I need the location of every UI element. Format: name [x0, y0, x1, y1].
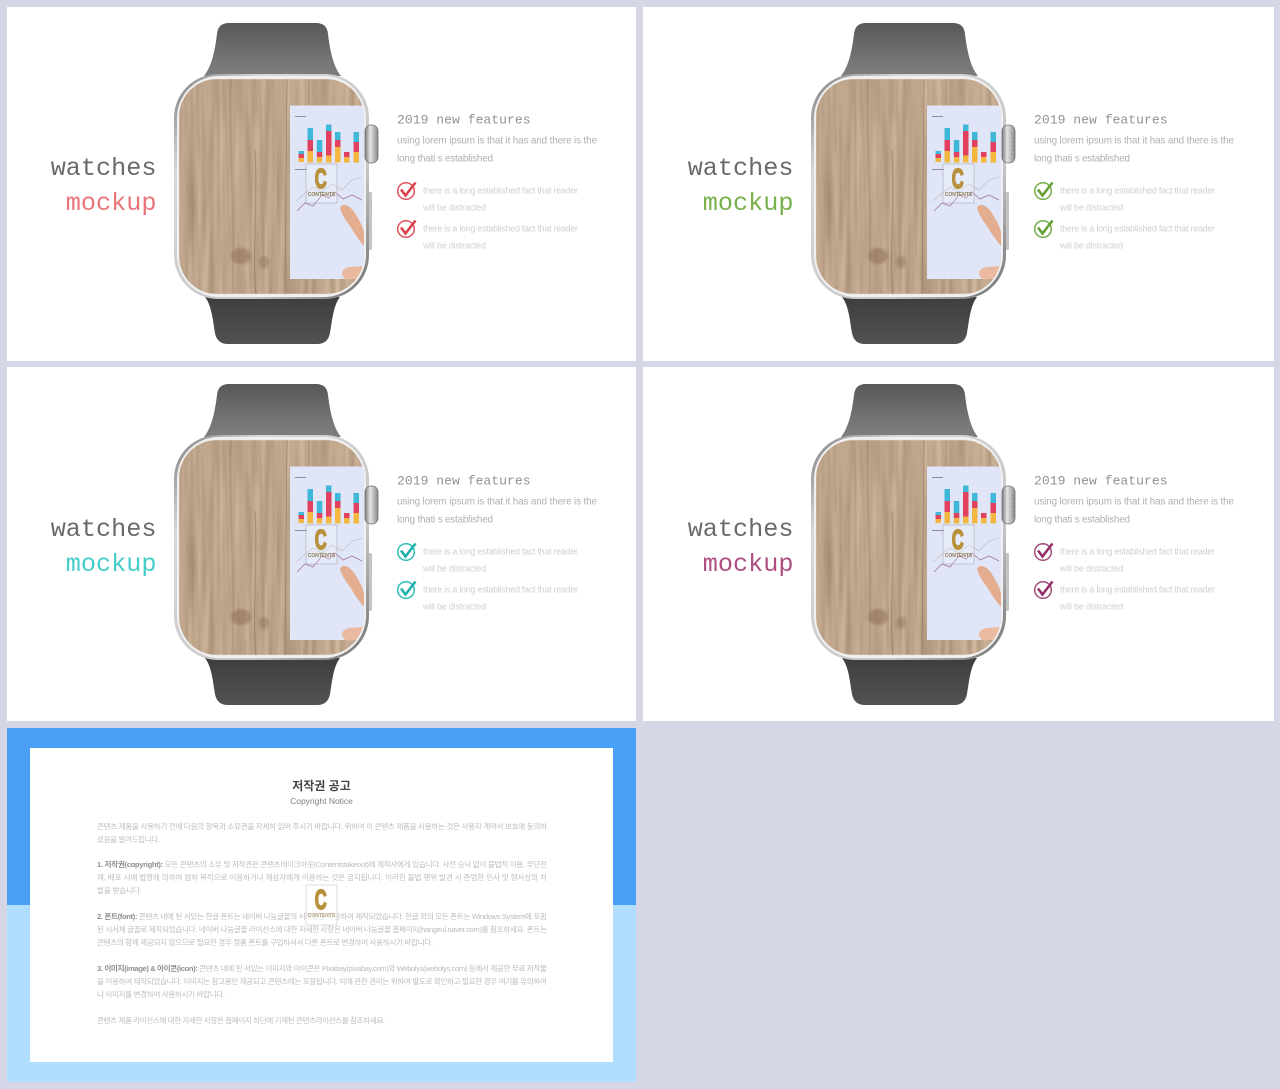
text block: intro: 콘텐츠 제품을 사용하기 전에 다음의 항목과 소유권을 자세히 읽어 주시기 바랍니다. 위하여 이 콘텐츠 제품을 사용하는 것은 사용자 계약서 보호에 동의하 — [97, 821, 547, 831]
panel: copyright notice — [7, 728, 636, 1082]
text block: section 1 copyright: 벌을 받습니다. — [97, 885, 142, 895]
text block: section 3 image and icon: 나 이미지를 변경하여 사용하시기 바랍니다. — [97, 989, 225, 999]
text block: section 1 copyright: 1. 저작권(copyright): 모든 콘텐츠의 소유 및 저작권은 콘텐츠테이크아웃(Contentstakeout)에 제작사에게 있습니다. 사전 승낙 없이 불법적 이용, 무단전 — [97, 859, 547, 869]
icon: watch mockup teal — [174, 384, 378, 705]
panel: plum watch slide — [643, 367, 1274, 721]
title: watches mockup plum: mockup — [703, 550, 794, 579]
text block: features red: 2019 new features — [397, 112, 531, 128]
text block: features teal: 2019 new features — [397, 474, 531, 488]
checklist item 2 plum: will be distracted — [1059, 602, 1123, 612]
title: watches mockup teal — [51, 515, 156, 579]
text block: features plum: long thati s established — [1034, 514, 1130, 526]
text block: intro — [97, 821, 547, 844]
text block: features teal — [397, 474, 598, 526]
checklist item 1 plum: there is a long established fact that reader — [1060, 546, 1215, 556]
text block: features green: long thati s established — [1034, 154, 1130, 164]
logo watermark center — [306, 884, 337, 925]
text block: features plum: using lorem ipsum is that it has and there is the — [1034, 496, 1234, 508]
text block: intro: 셨음을 알려드립니다. — [97, 834, 160, 844]
text block: section 3 image and icon: 을 이용하여 제작되었습니다. 이미지는 참고용만 제공되고 콘텐츠에는 포함됩니다. 이에 관한 권리는 위하여 별도로 확인하고 필요한 경우 여기를 유의하여 — [97, 976, 547, 986]
text block: features plum — [1034, 474, 1234, 526]
text block: section 1 copyright: 재, 배포 시에 법령에 의하여 엄히 목적으로 이용하거나 제삼자에게 이용하는 것은 금지됩니다. 이러한 불법 행위 발견 시 준엄한 민사 및 형사상의 처 — [97, 872, 547, 882]
text block: section 3 image and icon — [97, 963, 547, 999]
checklist item 1 teal: will be distracted — [422, 564, 486, 574]
text block: license footer: 콘텐츠 제품 라이선스에 대한 자세한 사항은 홈페이지 하단에 기재된 콘텐츠라이선스를 참조하세요. — [97, 1015, 385, 1025]
checklist item 1 green — [1035, 182, 1215, 212]
text block: section 2 font: 콘텐츠의 함께 제공되지 않으므로 필요한 경우 정품 폰트를 구입하셔서 다른 폰트로 변경하여 사용하시기 바랍니다. — [97, 937, 433, 947]
text block: features green: using lorem ipsum is that it has and there is the — [1034, 136, 1234, 146]
logo watermark red: C — [315, 163, 327, 194]
logo watermark green: C — [952, 163, 964, 194]
logo watermark plum: CONTENTS — [945, 553, 973, 559]
text block: features teal: using lorem ipsum is that it has and there is the — [397, 496, 598, 508]
icon: watch mockup green — [811, 23, 1015, 344]
logo watermark plum — [943, 524, 974, 564]
icon: watch mockup red — [174, 23, 378, 344]
logo watermark center: C — [315, 884, 327, 915]
checklist item 2 green: there is a long established fact that reader — [1060, 224, 1215, 234]
title: watches mockup plum — [688, 515, 794, 579]
checklist item 1 green: there is a long established fact that reader — [1060, 186, 1215, 196]
logo watermark teal: CONTENTS — [308, 553, 336, 559]
heading: copyright notice: 저작권 공고 — [292, 778, 351, 793]
checklist item 1 red: there is a long established fact that reader — [423, 186, 578, 196]
checklist item 2 teal: there is a long established fact that reader — [423, 584, 578, 594]
checklist item 1 plum — [1035, 544, 1215, 574]
text block: features green — [1034, 112, 1234, 164]
logo watermark green — [943, 163, 974, 203]
text block: features red: long thati s established — [397, 154, 493, 164]
text block: features red — [397, 112, 598, 164]
checklist item 2 green — [1035, 220, 1215, 250]
checklist item 2 red: there is a long established fact that reader — [423, 224, 578, 234]
checklist item 1 plum: will be distracted — [1059, 564, 1123, 574]
checklist item 1 green: will be distracted — [1059, 202, 1123, 212]
logo watermark green: CONTENTS — [945, 192, 973, 198]
panel: red watch slide — [7, 7, 636, 361]
logo watermark center: CONTENTS — [308, 913, 336, 919]
text block: section 1 copyright — [97, 859, 547, 895]
title: watches mockup green: watches — [688, 154, 794, 183]
text block: section 2 font: 2. 폰트(font): 콘텐츠 내에 된 서있는 한글 폰트는 네이버 나눔글꼴의 서작물을 바탕하여 제작되었습니다. 한글 외의 모든 폰트는 Windows System에 포함 — [97, 911, 547, 921]
title: watches mockup green — [688, 154, 794, 218]
checklist item 2 red: will be distracted — [422, 240, 486, 250]
panel: teal watch slide — [7, 367, 636, 721]
checklist item 2 teal: will be distracted — [422, 602, 486, 612]
logo watermark red — [306, 163, 337, 203]
title: watches mockup teal: watches — [51, 515, 156, 544]
text block: features teal: long thati s established — [397, 514, 493, 526]
text block: section 2 font: 된 시서체 글꼴로 제작되었습니다. 네이버 나눔글꼴 라이선스에 대한 자세한 사항은 네이버 나눔글꼴 홈페이지(hangeul.naver.com)를 참조하세요. 폰트는 — [97, 924, 547, 934]
checklist item 2 green: will be distracted — [1059, 240, 1123, 250]
checklist item 1 teal: there is a long established fact that reader — [423, 546, 578, 556]
text block: section 3 image and icon: 3. 이미지(image) & 아이콘(icon): 콘텐츠 내에 된 서있는 이미지와 아이콘은 Pixabay(pixabay.com)와 Webolys(webolys.com) 등에서 제공한 무료 저작물 — [97, 963, 547, 973]
icon: watch mockup plum — [811, 384, 1015, 705]
text block: features red: using lorem ipsum is that it has and there is the — [397, 136, 598, 146]
checklist item 2 plum — [1035, 582, 1215, 612]
logo watermark plum: C — [952, 524, 964, 555]
logo watermark teal: C — [315, 524, 327, 555]
checklist item 2 plum: there is a long established fact that reader — [1060, 584, 1215, 594]
text block: features green: 2019 new features — [1034, 112, 1168, 128]
title: watches mockup green: mockup — [703, 189, 794, 218]
checklist item 1 red: will be distracted — [422, 202, 486, 212]
checklist item 1 red — [398, 182, 578, 212]
title: watches mockup red: watches — [51, 154, 156, 183]
panel: green watch slide — [643, 7, 1274, 361]
text block: features plum: 2019 new features — [1034, 474, 1168, 488]
title: watches mockup teal: mockup — [66, 550, 156, 579]
logo watermark red: CONTENTS — [308, 192, 336, 198]
title: watches mockup red: mockup — [66, 189, 156, 218]
checklist item 2 teal — [398, 582, 578, 612]
heading: copyright notice: Copyright Notice — [290, 796, 353, 806]
title: watches mockup plum: watches — [688, 515, 794, 544]
title: watches mockup red — [51, 154, 156, 218]
logo watermark teal — [306, 524, 337, 564]
checklist item 1 teal — [398, 544, 578, 574]
checklist item 2 red — [398, 220, 578, 250]
text block: section 2 font — [97, 911, 547, 947]
heading: copyright notice — [290, 778, 353, 806]
